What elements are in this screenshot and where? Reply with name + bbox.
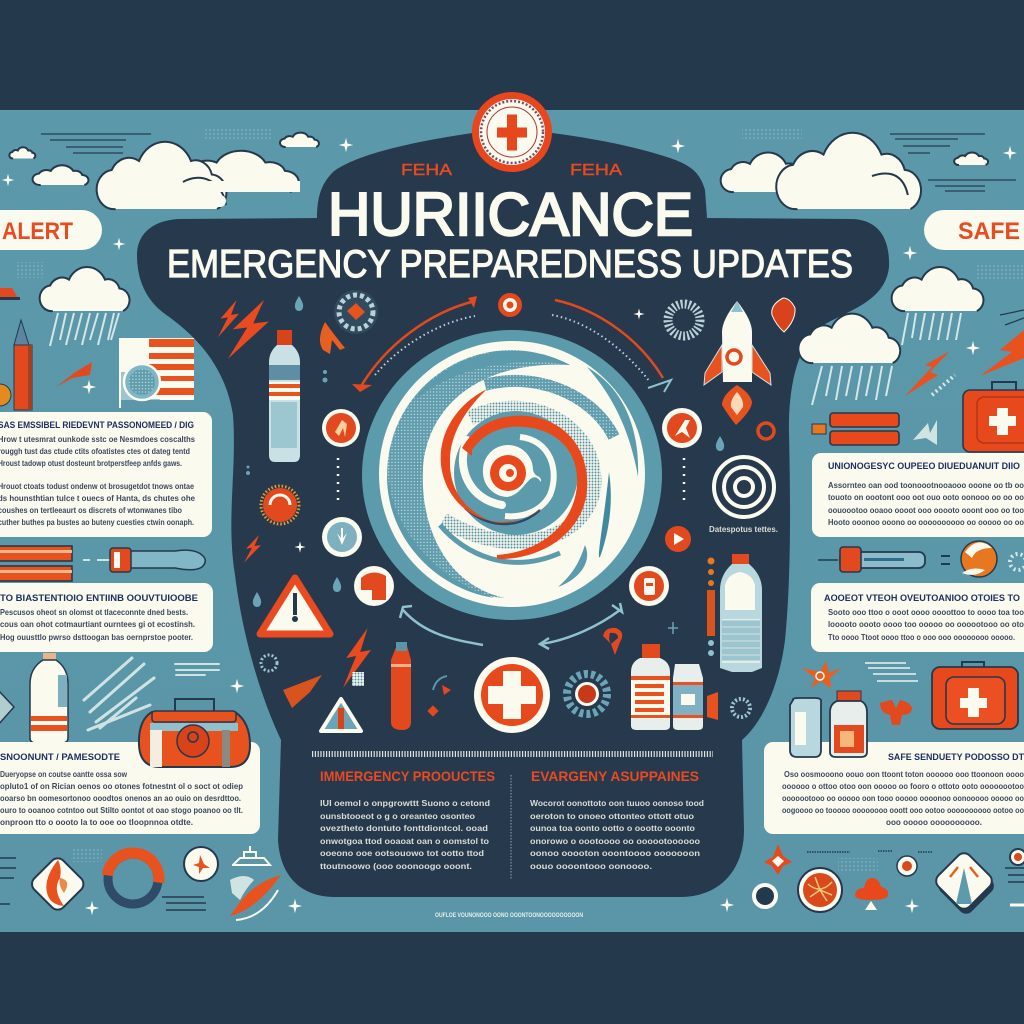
icon: small target — [897, 856, 917, 876]
icon: small bolt — [244, 535, 261, 563]
cream ring arm — [505, 437, 554, 516]
bottom panel left column: oveztheto dontuto fonttdiontcol. ooad — [320, 823, 488, 833]
small cloud top — [280, 133, 319, 147]
icon: small diamond left — [0, 690, 14, 725]
spiral eye — [499, 464, 517, 482]
arrow: lower left — [400, 606, 483, 645]
panel: briefing left — [0, 412, 212, 537]
SAFE badge — [924, 210, 1024, 250]
orange arm one — [441, 389, 545, 523]
icon: burst top right — [668, 304, 700, 336]
icon: warning triangle — [260, 578, 330, 634]
panel: left second — [0, 583, 213, 652]
icon: life ring — [107, 850, 162, 904]
icon: diamond tree badge — [933, 850, 997, 917]
icon: emergency bag left — [139, 699, 250, 767]
icon: first aid kit right top — [963, 382, 1024, 452]
lines bottom right — [1005, 868, 1024, 905]
panel: left second: TO BIASTENTIOIO ENTIINB OOUVTUIOOBE — [0, 593, 198, 604]
panel: right second — [811, 583, 1024, 652]
panel: left third: opluto1 of on Rician oenos oo otones fotnestnt ol o soct ot odiep — [0, 781, 243, 791]
icon: water bottle centre — [269, 330, 300, 462]
icon: wind streaks — [84, 658, 219, 730]
cream arm left — [463, 440, 502, 505]
small star speck — [668, 622, 678, 634]
emblem: red cross seal — [472, 92, 552, 172]
bottom panel left column — [320, 768, 495, 871]
bottom panel left column: ounsbtooeot o g o oreanteo osonteo — [320, 811, 475, 821]
icon: top small badge — [498, 293, 522, 317]
icon: burst badge top left — [334, 290, 378, 334]
orange arm two — [462, 416, 587, 559]
hurricane swirl — [362, 330, 662, 620]
panel: briefing left: Hrow t utesmrat ounkode sstc oe Nesmdoes coscalths — [0, 434, 195, 444]
bottom panel left column: onwotgoa ttod ooaoat oan o oomstol to — [320, 836, 489, 846]
bottom panel right column: ounoa toa oonto ootto o oootto ooonto — [530, 823, 695, 833]
lower teal sweep — [440, 525, 560, 562]
icon: circle badge right top — [662, 408, 702, 448]
FEMA labels: FEHA — [570, 162, 622, 179]
icon: red tubes left — [0, 546, 72, 581]
sparkle stars — [2, 138, 1017, 915]
icon: large water bottle — [720, 554, 762, 672]
arrow: orange arc right — [552, 300, 671, 392]
panel: briefing left: Hroust tadowp otust dosteunt brotperstfeep anfds gaws. — [0, 458, 182, 468]
panel: right third: ooo ooooo oooooooooo. — [886, 817, 982, 827]
icon: rocket — [704, 301, 771, 425]
panel: briefing left: Hrouot ctoats todust ondenw ot brosugetdot tnows ontae — [0, 481, 194, 491]
icon: orange cloud — [855, 878, 888, 910]
ALERT badge: ALERT — [2, 218, 73, 245]
weather lines top right — [890, 134, 1016, 191]
icon: orange extinguisher — [391, 642, 411, 730]
icon: orange squiggle — [603, 628, 622, 655]
panel: briefing left: rouggh tust das ctude ctits ofoatistes ctes ot dateg tentd — [0, 446, 190, 456]
bottom panel right column: oonoo ooooton ooontoooo ooooooon — [530, 848, 700, 858]
icon: red tubes right — [812, 413, 899, 445]
outer dotted crescent — [387, 350, 570, 598]
icon: circle badge 2 — [322, 517, 362, 557]
icon: medicine bottles — [631, 644, 718, 730]
orange eye — [490, 455, 526, 491]
right teal arm — [587, 367, 638, 477]
icon: orange compass star — [802, 661, 841, 689]
panel: left second: Pescusos oheot sn olomst ot tlaceconnte dned bests. — [0, 607, 188, 617]
icon: flag with disc — [119, 338, 194, 408]
panel: left second: cous oan ohot cotmaurtiant ourntees gi ot ecostinsh. — [0, 619, 195, 629]
wedge — [558, 545, 587, 587]
panel: left third: SNOONUNT / PAMESODTE — [0, 752, 120, 763]
bottom panel left column: IMMERGENCY PROOUCTES — [320, 768, 495, 784]
bottom panel right column: Wocorot oonottoto oon tuuoo oonoso tood — [530, 798, 704, 808]
FEMA labels — [401, 162, 622, 179]
icon: marker beacon left — [0, 288, 32, 410]
icon: dust speck — [261, 655, 277, 671]
icon: jars right — [790, 691, 867, 757]
icon: syringe tube right — [818, 547, 925, 572]
icon: orange star bottom — [764, 844, 792, 875]
bottom panel right column — [530, 768, 704, 871]
icon: circle badge 1 — [322, 409, 360, 447]
icon: streaked bolt — [283, 675, 322, 708]
panel: right third — [764, 742, 1024, 834]
panel: left second: Hog ouusttlo pwrso dsttoogan bas oernprstoe pooter. — [0, 632, 193, 642]
icon: orange ring — [758, 423, 774, 439]
SAFE badge: SAFE — [958, 218, 1020, 245]
dotted vertical lines — [338, 458, 684, 500]
icon: large cross badge — [474, 657, 550, 733]
panel: right second: AOOEOT VTEOH OVEUTOANIOO OTOIES TO — [824, 593, 1020, 604]
bottom panel right column: oeroton to onoeo ottonteo ottott otuo — [530, 811, 694, 821]
inner dotted arc — [443, 408, 594, 542]
icon: water bottle left — [30, 653, 68, 743]
panel: left third — [0, 742, 260, 834]
right thin arm — [599, 472, 611, 557]
icon: swirl ball right — [961, 541, 997, 577]
icon: circle badge lower right — [629, 566, 669, 606]
bottom panel left column: IUI oemol o onpgrowttt Suono o cetond — [320, 798, 490, 808]
panel: right first — [812, 453, 1024, 537]
panel: briefing left: coushes on tertleeaurt os discrets of wtonwanes tibo — [0, 505, 182, 515]
panel: left third: Dueryopse on coutse oantte ossa sow — [0, 769, 127, 779]
dark shadow under lower arm — [465, 508, 540, 524]
icon: small shard — [913, 420, 937, 445]
big clouds right — [721, 133, 921, 209]
title — [167, 181, 853, 286]
dash marks — [941, 556, 950, 564]
icon: dotted capsule column — [707, 558, 715, 656]
small text marks bottom right — [807, 851, 933, 852]
panel: briefing left: cuther buthes pa bustes ao buteny cuesties ctwin oonaph. — [0, 517, 194, 527]
icon: ship — [232, 846, 270, 865]
weather lines top left — [41, 134, 151, 153]
icon: orange pieces — [427, 676, 451, 717]
lines right — [865, 663, 918, 681]
panel: briefing left: ds hounsthtian tulce t ouecs of Hanta, ds chutes ohe — [0, 493, 195, 503]
icon: flower burst — [567, 674, 607, 714]
bottom panel right column: onorowo o oootoooo oo oooootoooooo — [530, 836, 700, 846]
halftone patches — [16, 127, 1024, 872]
icon: bolt right side — [905, 310, 1024, 396]
panel: left third: onproon tto o oooto la to ooe oo tloopnnoa otdte. — [0, 817, 193, 827]
arrow: orange arc left — [352, 296, 477, 392]
bottom panel left column: ooeono ooe ootsouowo tot ootto ttod — [320, 848, 484, 858]
rain cloud left — [40, 267, 130, 346]
rain cloud right lower — [798, 314, 900, 405]
icon: flame top right — [772, 298, 795, 332]
small caption: Datespotus tettes. — [709, 524, 778, 534]
rain cloud right upper — [892, 267, 983, 345]
FEMA labels: FEHA — [401, 162, 452, 179]
dashes right — [932, 375, 955, 395]
icon: flame fragment — [320, 322, 345, 354]
icon: ring bottom — [754, 885, 776, 907]
bottom panel right column: EVARGENY ASUPPAINES — [531, 768, 699, 784]
bottom panel divider — [510, 775, 512, 880]
arrow: lower right — [540, 603, 622, 649]
icon: dust speck right — [732, 699, 750, 717]
icon: syringe tube left — [83, 548, 205, 572]
title: HURIICANCE — [328, 181, 693, 248]
icon: circle badge 3 — [354, 566, 394, 606]
panel: briefing left: SAS EMSSIBEL RIEDEVNT PASSONOMEED / DIG — [0, 420, 194, 431]
cream centre — [483, 445, 541, 497]
big clouds left — [97, 142, 300, 209]
icon: orange disc — [798, 868, 842, 912]
icon: water drops — [246, 296, 724, 607]
icon: sun burst — [261, 486, 299, 524]
icon: orange circle play — [665, 526, 691, 552]
bottom panel right column: oouo oooontooo oonoooo. — [530, 861, 652, 871]
panel: left third: ooarso bn oomesortonoo ooodtos onenos an ao ouio on desrdttoo. — [0, 793, 241, 803]
small lines bottom left — [0, 858, 206, 910]
icon: first aid kit right lower — [932, 662, 1018, 729]
inner dotted arc top — [485, 381, 614, 437]
icon: bolts top left — [218, 300, 269, 359]
icon: diamond flame badge — [29, 855, 87, 913]
teal inner disc — [454, 411, 578, 535]
icon: small triangle — [321, 699, 361, 731]
icon: small badge right edge — [1010, 849, 1024, 865]
central dark panel — [137, 133, 889, 897]
icon: concentric target — [714, 457, 774, 517]
bottom panel: dotted rule — [312, 751, 713, 757]
ALERT badge — [0, 210, 102, 250]
bottom panel left column: ttoutnoowo (ooo ooonoogo ooont. — [320, 861, 472, 871]
small cloud right — [954, 152, 988, 165]
title: EMERGENCY PREPAREDNESS UPDATES — [167, 243, 853, 286]
icon: swoosh — [230, 875, 281, 920]
small clouds left — [9, 147, 88, 185]
outer teal edge — [387, 351, 570, 598]
icon: orange pencil — [56, 362, 92, 387]
panel: left third: ouro to ooanoo cotntoo out Stilto oontot ot oao stogo poanoo oo tlt. — [0, 805, 243, 815]
icon: bolt centre left — [343, 628, 371, 688]
dust right edge — [1010, 554, 1024, 570]
icon: flower badge — [184, 847, 218, 881]
footer caption: OUFLOE VOUNONOOO OONO OOONTOONOOOOOOOOOON — [435, 912, 583, 919]
icon: shirt shape — [880, 700, 912, 725]
